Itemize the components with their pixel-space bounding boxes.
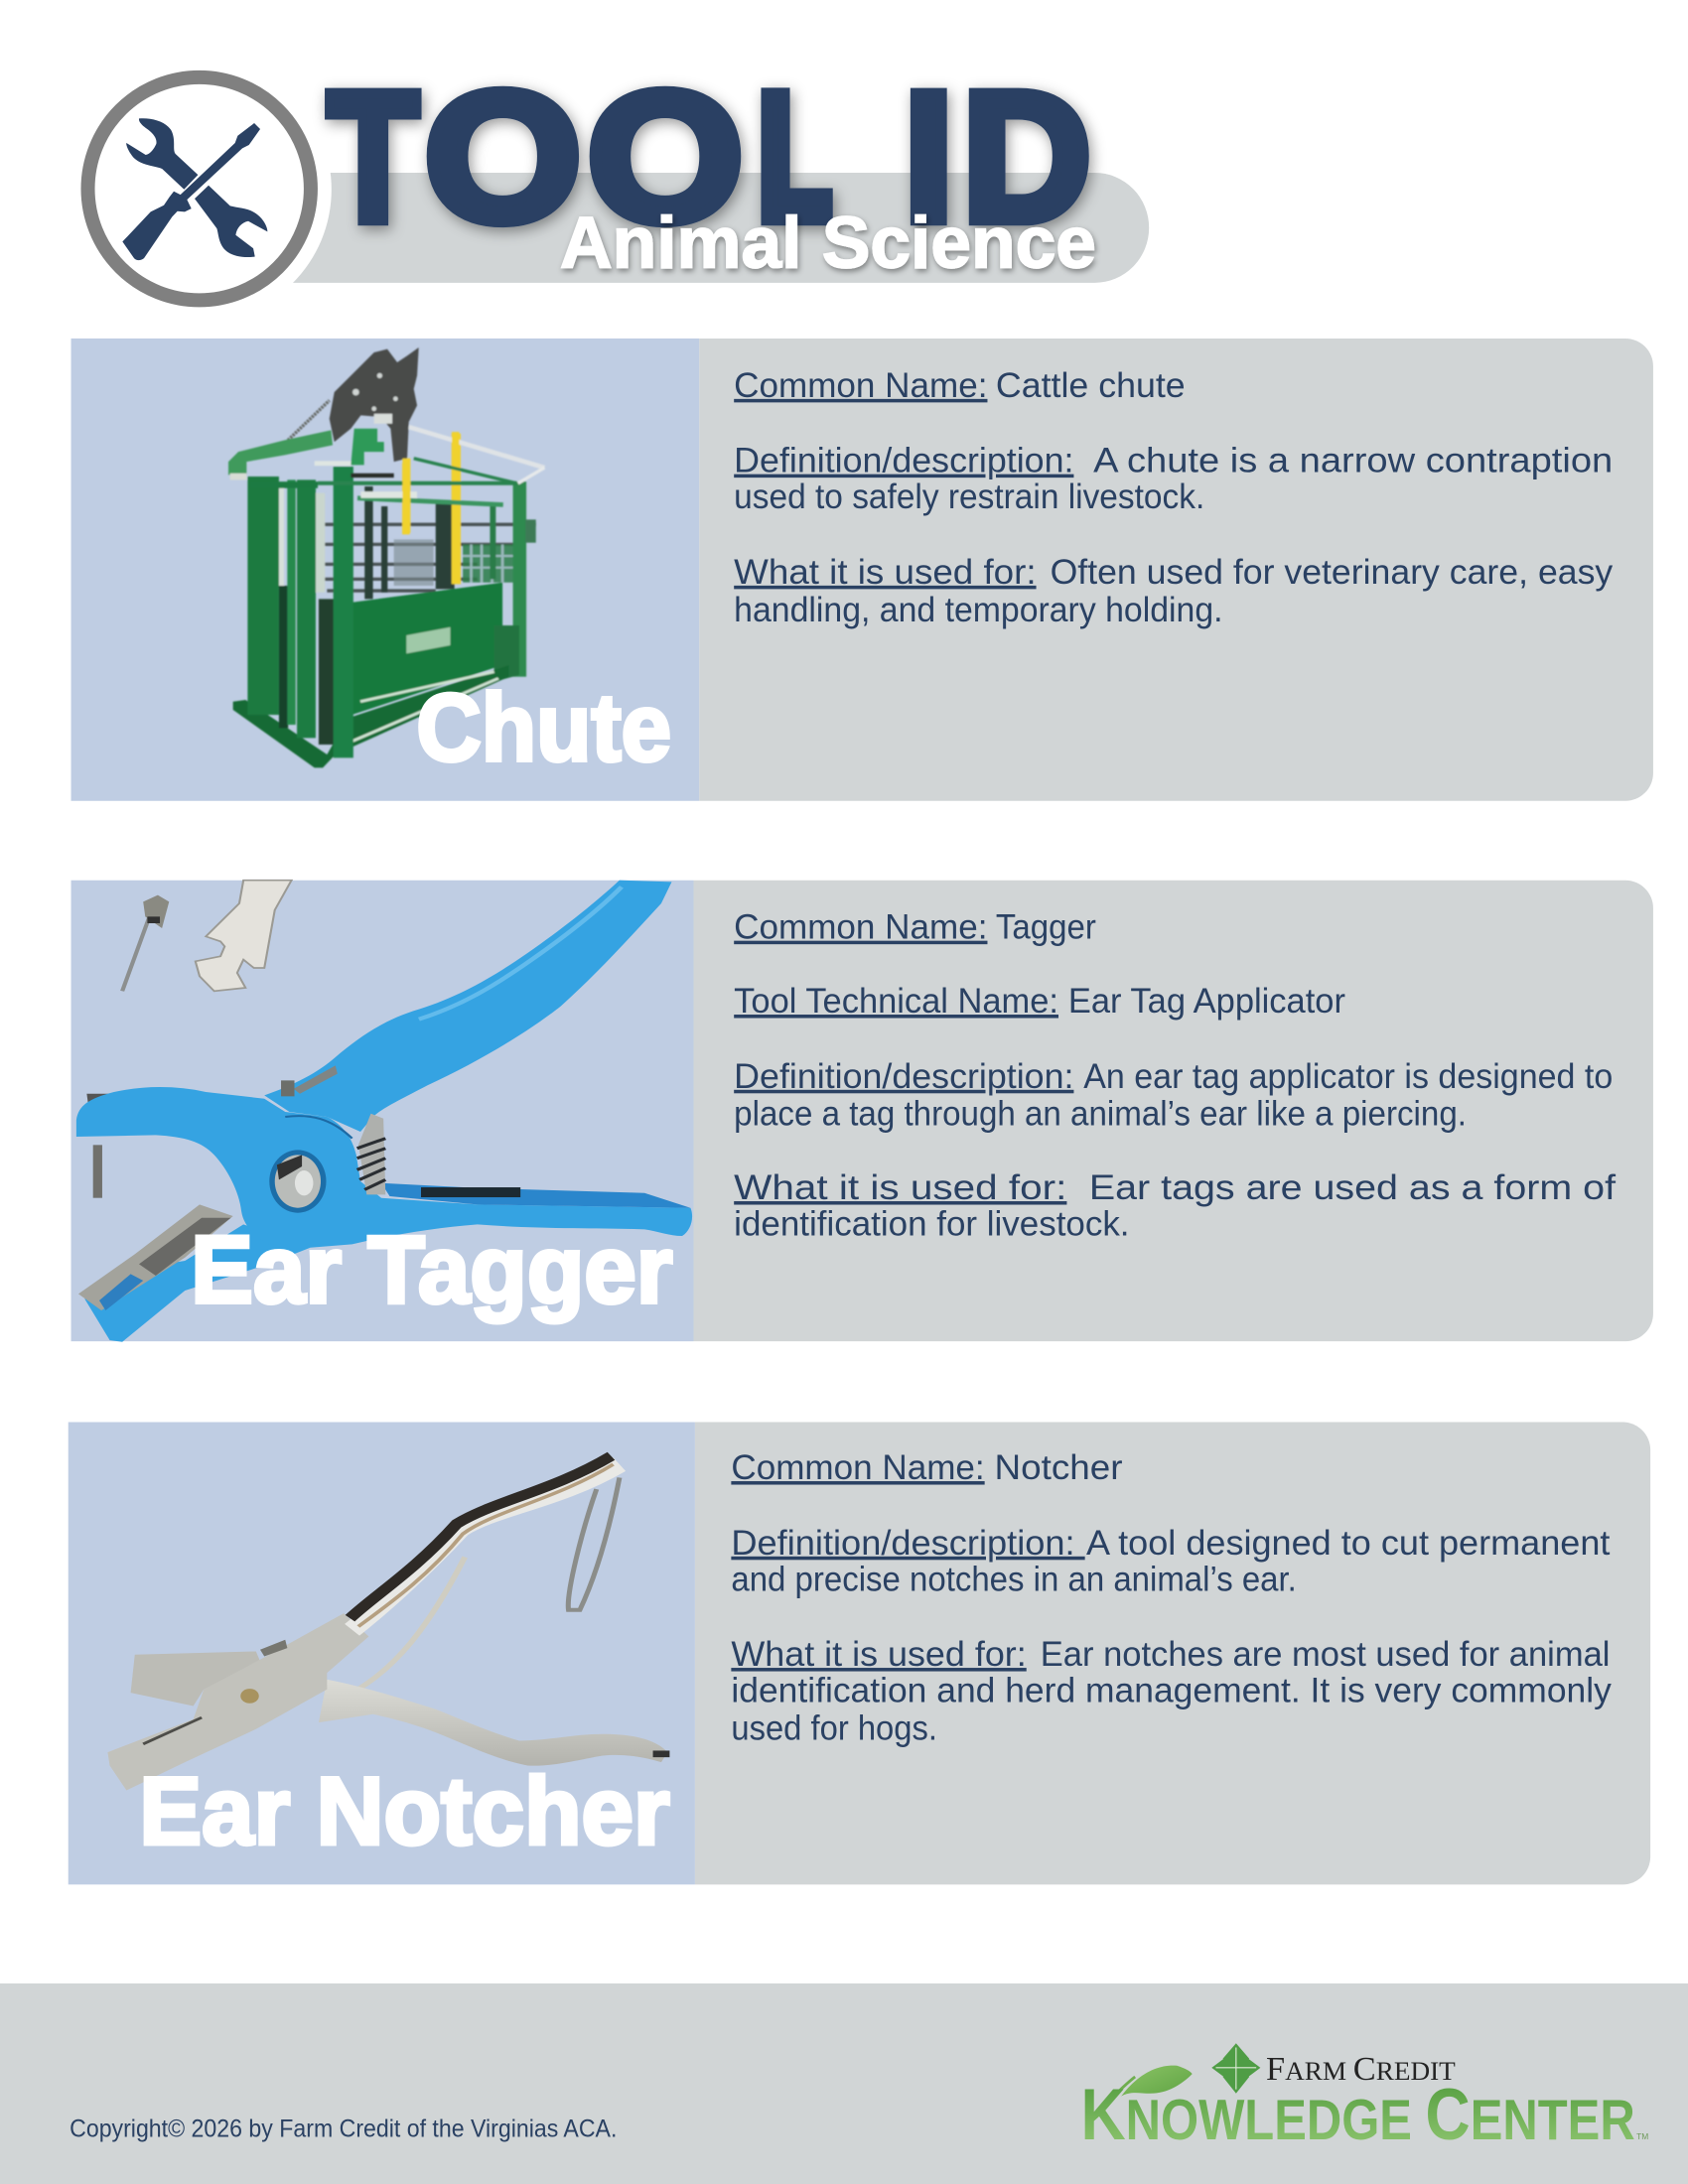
- text: use: [734, 553, 1614, 629]
- text: definition: A chute is a narrow contraption: [1093, 442, 1613, 480]
- title: TOOL ID: O: [425, 55, 581, 260]
- text: definition: [731, 1524, 1611, 1598]
- text: use: handling, and temporary holding.: [734, 591, 1223, 629]
- title: TOOL ID: D: [962, 55, 1091, 260]
- text: common name: Common Name:: [731, 1448, 985, 1487]
- image: cattle chute: [228, 347, 544, 767]
- panel: ear tagger: [71, 881, 1653, 1342]
- text: definition: A tool designed to cut permanent: [1086, 1524, 1611, 1563]
- panel: ear notcher: [69, 1423, 1650, 1884]
- text: technical name: [734, 982, 1345, 1021]
- logo: Farm Credit Knowledge Center: [1080, 2043, 1648, 2155]
- text: common name: [734, 908, 1096, 947]
- text: Farm Credit: FARM CREDIT: [1266, 2051, 1456, 2088]
- text: definition: [734, 442, 1613, 516]
- text: use: identification and herd management. It is very commonly: [731, 1672, 1612, 1710]
- text: use: [731, 1635, 1612, 1747]
- text: definition: Definition/description:: [734, 1057, 1073, 1096]
- text: common name: Common Name:: [734, 908, 987, 947]
- text: use: Ear tags are used as a form of: [1089, 1168, 1616, 1207]
- title: TOOL ID: L: [760, 60, 830, 254]
- text: common name: Common Name:: [734, 366, 987, 405]
- title: TOOL ID: O: [587, 55, 744, 260]
- icon: crossed wrench and screwdriver badge: [67, 58, 332, 322]
- text: use: Ear notches are most used for animal: [1041, 1635, 1610, 1674]
- text: use: What it is used for:: [734, 553, 1037, 592]
- title backing pill: [265, 173, 1149, 283]
- text: use: used for hogs.: [731, 1708, 937, 1747]
- text: technical name: Tool Technical Name:: [734, 982, 1058, 1021]
- text: common name: [731, 1448, 1123, 1487]
- text: common name: Notcher: [994, 1448, 1123, 1487]
- title: TOOL ID: I: [904, 55, 953, 260]
- text: use: [734, 1168, 1616, 1244]
- label: Ear Notcher: Ear Notcher: [139, 1757, 670, 1865]
- icon: leaf: [1103, 2066, 1193, 2106]
- label: Chute: Chute: [416, 673, 671, 781]
- text: definition: Definition/description:: [731, 1524, 1085, 1563]
- copyright text: Copyright© 2026 by Farm Credit of the Virginias ACA.: [70, 2115, 617, 2142]
- text: technical name: Ear Tag Applicator: [1068, 982, 1345, 1021]
- title: TOOL ID: [328, 55, 1091, 260]
- text: definition: place a tag through an animal’s ear like a piercing.: [734, 1095, 1467, 1134]
- image: steel ear notcher: [107, 1456, 669, 1790]
- text: common name: [734, 366, 1186, 405]
- text: use: identification for livestock.: [734, 1205, 1130, 1244]
- subtitle: Animal Science: Animal Science: [560, 203, 1096, 283]
- text: common name: Cattle chute: [996, 366, 1186, 405]
- text: definition: and precise notches in an animal’s ear.: [731, 1560, 1297, 1598]
- header banner: [67, 55, 1149, 322]
- text: definition: used to safely restrain livestock.: [734, 478, 1204, 516]
- icon: clover diamond: [1211, 2043, 1260, 2094]
- text: use: What it is used for:: [731, 1635, 1027, 1674]
- panel: chute: [71, 339, 1653, 801]
- text: definition: Definition/description:: [734, 442, 1073, 480]
- text: common name: Tagger: [996, 908, 1096, 947]
- text: Knowledge Center: KNOWLEDGE CENTER: [1080, 2073, 1635, 2155]
- text: definition: [734, 1057, 1613, 1134]
- text: trademark: TM: [1636, 2131, 1648, 2141]
- label: Ear Tagger: Ear Tagger: [191, 1215, 672, 1323]
- text: use: Often used for veterinary care, easy: [1051, 553, 1614, 592]
- text: definition: An ear tag applicator is designed to: [1083, 1057, 1613, 1096]
- title: TOOL ID: T: [328, 55, 419, 260]
- text: use: What it is used for:: [734, 1168, 1066, 1207]
- image: blue ear tagger: [76, 881, 692, 1342]
- footer band: [0, 1983, 1688, 2184]
